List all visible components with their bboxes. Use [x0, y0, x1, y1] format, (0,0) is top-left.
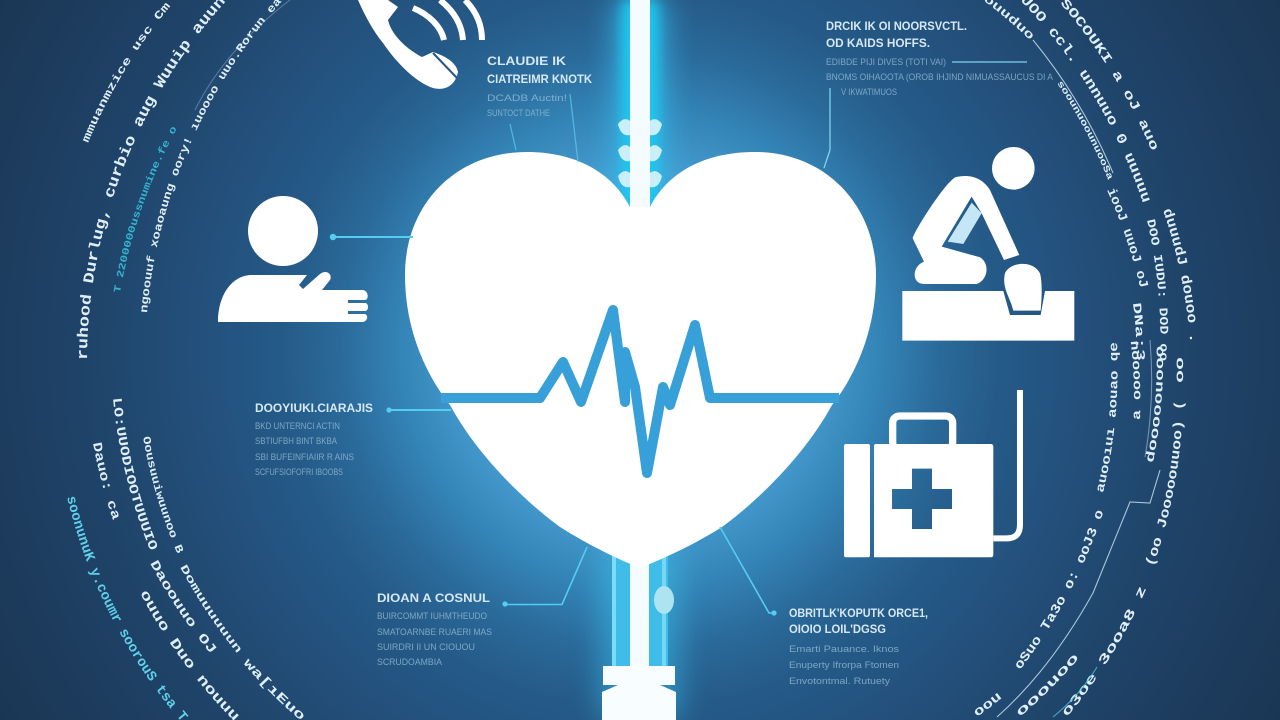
- connectors: top right text: [824, 62, 1027, 168]
- circular text ring: lower right: auooıuı aouao qe: [1098, 343, 1120, 492]
- circular text ring: lower right: oo: [1176, 358, 1184, 382]
- text block: left middle: BKD UNTERNCI ACTIN: [255, 421, 340, 432]
- text block: top centre: [487, 54, 592, 119]
- circular text ring: lower left: ouuo Duo nouuu: [142, 592, 239, 720]
- text block: top right: [826, 19, 1054, 98]
- circular text ring: lower left: soonunuK y.coumr soorouS tsa T: [68, 496, 188, 720]
- text block: bottom right: Enuperty Ifrorpa Ftomen: [789, 660, 899, 671]
- text block: top right: EDIBDE PIJI DIVES (TOTI VAI): [826, 57, 946, 68]
- circular text ring: lower right: [974, 341, 1186, 716]
- circular text ring: lower right: dooooouooo: [1146, 346, 1164, 462]
- text block: bottom right: Envotontmal. Rutuety: [789, 676, 890, 687]
- circular text ring: upper right: DOO IUDU: DOD oo: [1147, 219, 1168, 360]
- circular text ring: upper right: [984, 0, 1196, 360]
- circular text ring: lower left: wa[ıEuo: [244, 658, 304, 719]
- text block: left middle: SBTIUFBH BINT BKBA: [255, 436, 338, 447]
- connector: bottom right text to heart: [720, 527, 777, 616]
- connector: bottom left text to heart: [502, 547, 587, 607]
- circular text ring: upper right: soounuoounuooSa: [1058, 82, 1112, 180]
- text block: top centre: CLAUDIE IK: [487, 54, 566, 68]
- circular text ring: lower right: a ooooou: [1130, 341, 1140, 420]
- connectors: top centre text to heart: [510, 94, 578, 162]
- text block: bottom left: SCRUDOAMBIA: [377, 657, 443, 668]
- text block: top right: OD KAIDS HOFFS.: [826, 36, 930, 50]
- text block: left middle: SCFUFSIOFOFRI IBOOBS: [255, 467, 343, 478]
- heart with pulse: [405, 152, 876, 568]
- text block: left middle: SBI BUFEINFIAIIR R AINS: [255, 452, 354, 463]
- text block: top right: BNOMS OIHAOOTA (OROB IHJIND NIMUASSAUCUS DI A: [826, 72, 1054, 83]
- circular text ring: upper right: SOCOUKI a oJ auo: [1062, 0, 1157, 150]
- text block: top right: V IKWATIMUOS: [841, 87, 897, 98]
- circular text ring: lower right: (oo Jooooouuoo) (: [1146, 402, 1186, 564]
- connector: person to heart: [330, 234, 413, 240]
- circular text ring: lower right: ooouoo: [1018, 656, 1078, 715]
- circular text ring: upper right: duuudJ douoo .: [1164, 209, 1196, 340]
- text block: bottom left: SUIRDRI II UN CIOUOU: [377, 642, 475, 653]
- text block: bottom right: OBRITLK'KOPUTK ORCE1,: [789, 606, 928, 620]
- circular text ring: lower left: Daoouuo OJ: [150, 560, 216, 652]
- text block: top right: DRCIK IK OI NOORSVCTL.: [826, 19, 967, 33]
- text block: left middle: [255, 401, 373, 478]
- text block: bottom left: DIOAN A COSNUL: [377, 591, 490, 605]
- text block: bottom right: OIOIO LOIL'DGSG: [789, 622, 886, 636]
- icon: medical kit with tube: [844, 390, 1020, 557]
- text block: left middle: DOOYIUKI.CIARAJIS: [255, 401, 373, 415]
- glowing vertical column: top: [612, 0, 668, 215]
- circular text ring: upper right: iooJ uuoJ oJ: [1107, 188, 1148, 286]
- text block: bottom left: BUIRCOMMT IUHMTHEUDO: [377, 611, 487, 622]
- text block: bottom left: SMATOARNBE RUAERI MAS: [377, 627, 492, 638]
- circular text ring: upper right: DNa:3: [1133, 303, 1145, 360]
- circular text ring: lower right: o3oe 3ooa8 z: [1064, 587, 1146, 715]
- circular text ring: lower right: oSuo Ta3o o: ooJ3 o: [1016, 510, 1102, 668]
- icon: person with hand on chest: [218, 196, 368, 322]
- text block: top centre: CIATREIMR KNOTK: [487, 72, 592, 86]
- ring divider lines: [195, 0, 1160, 717]
- circular text ring: lower left: Oousuuiwuunoo B: [144, 436, 183, 553]
- circular text ring: lower left: LO:UUODIOOTUUUIO: [113, 398, 158, 550]
- glowing vertical column: bottom connector: [600, 545, 680, 720]
- circular text ring: lower right: oou: [974, 693, 1002, 716]
- text block: top centre: DCADB Auctin!: [487, 93, 567, 104]
- icon: CPR responder: [902, 147, 1074, 341]
- circular text ring: lower left: Dauo: ca: [93, 442, 118, 520]
- circular text ring: upper left: T 2200000ussnumine.fe o: [114, 127, 176, 292]
- connector: left middle text to heart: [386, 407, 451, 413]
- circular text ring: lower left: Domuuuuuun: [180, 564, 240, 653]
- text block: top centre: SUNTOCT DATHE: [487, 108, 550, 119]
- text block: bottom left: [377, 591, 492, 668]
- circular text ring: upper left: [76, 0, 282, 358]
- text block: bottom right: [789, 606, 928, 687]
- icon: telephone handset: [358, 0, 482, 89]
- circular text ring: lower left: [68, 398, 304, 720]
- text block: bottom right: Emarti Pauance. Iknos: [789, 644, 899, 655]
- ECG pulse line with flat band sides: [441, 310, 839, 473]
